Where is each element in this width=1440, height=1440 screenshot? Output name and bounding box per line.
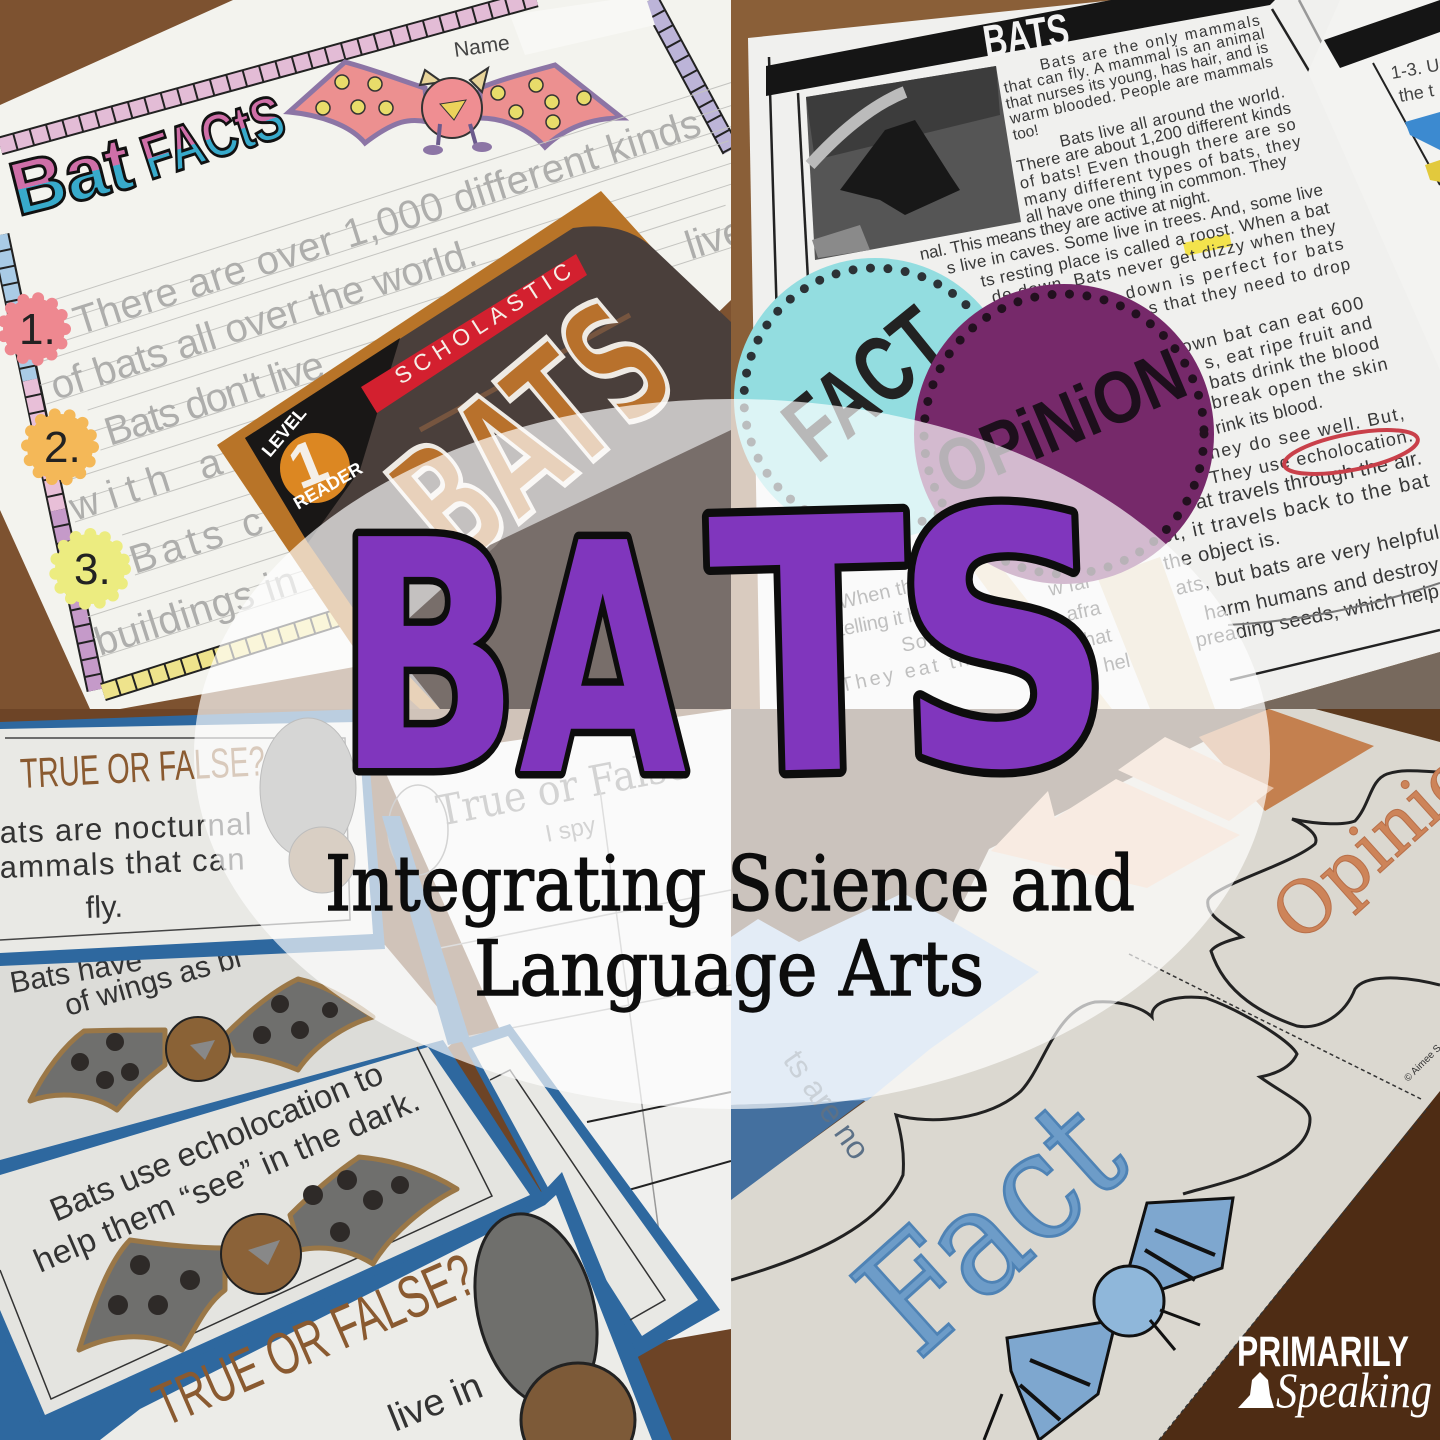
article text: preading seeds, which help	[1194, 580, 1440, 652]
handwritten fact 3: Bats don't live	[99, 343, 330, 455]
photo: bats article	[731, 0, 1440, 709]
article text: too!	[1011, 122, 1040, 144]
article text: telling it how	[837, 599, 946, 641]
article text: bats drink the blood	[1207, 333, 1381, 393]
card 2: Bats have	[7, 944, 145, 1000]
icon: coloured bat	[289, 62, 622, 155]
article paper	[748, 0, 1440, 709]
cloud: fact	[731, 997, 1310, 1389]
handwritten line 4	[68, 419, 256, 522]
title: BATS: T	[705, 442, 915, 855]
article text: hey do see well. But,	[1208, 403, 1406, 463]
highlight: echolocation	[1282, 428, 1420, 476]
number badge 1: 1.	[19, 305, 56, 354]
photo: bat facts worksheet	[0, 0, 767, 709]
article text: many different types of bats, they	[1022, 132, 1303, 210]
article text	[836, 12, 1440, 697]
article text: at travels through the air.	[1194, 447, 1424, 514]
number badge 3	[55, 534, 125, 604]
article text: s, eat ripe fruit and	[1202, 312, 1374, 373]
article text: s live in caves. Some live in trees. And, some live	[945, 180, 1325, 278]
fold lines	[1129, 954, 1432, 1440]
article text: ts resting place is called a roost. When a bat	[979, 198, 1331, 291]
number badge 3: 3.	[74, 545, 111, 594]
text on stick side: w far	[1045, 570, 1094, 601]
text on stick side: hel	[1101, 650, 1132, 677]
handwritten line 5: Bats c	[124, 499, 268, 583]
article text: rink its blood.	[1213, 392, 1325, 438]
card stack	[461, 1024, 720, 1358]
paddle: OPINION	[914, 284, 1214, 584]
article text: all have one thing in common. They	[1024, 151, 1289, 227]
logo: Primarily Speaking	[1237, 1328, 1432, 1418]
book: Scholastic Bats: LEVEL	[258, 403, 310, 461]
article text: that nurses its young, has hair, and is	[1004, 39, 1270, 113]
coloured page border	[0, 0, 731, 692]
card 1	[0, 709, 385, 966]
text on stick side: afra	[1064, 597, 1104, 626]
right page	[1308, 0, 1440, 291]
paddle: FACT	[734, 258, 982, 536]
article text: de down. Bats never get dizzy when they	[990, 216, 1338, 307]
worksheet: True or False	[433, 739, 692, 836]
subtitle: Language Arts	[474, 924, 984, 1013]
article text: ct, it travels back to the bat	[1159, 470, 1432, 548]
handwritten fact 2: of bats all over the world.	[45, 231, 482, 409]
heading: Bat Facts	[8, 96, 286, 217]
card 4: live in	[383, 1365, 488, 1440]
handwritten line 6: buildings in	[89, 559, 302, 665]
title: BATS	[336, 437, 1119, 855]
card 1: TRUE OR FALSE?	[19, 737, 266, 797]
article text: Bats are the only mammals	[1038, 12, 1261, 74]
paddle: OPINION: OPiNiON	[924, 332, 1197, 511]
book shadow seen through the oval	[385, 430, 731, 709]
article text: own bat can eat 600	[1179, 293, 1365, 357]
icon: blue bat	[984, 1198, 1233, 1440]
blue fact strips: ts are no	[776, 1043, 877, 1166]
photo: true or false cards	[0, 709, 731, 1440]
flapbook sheet	[731, 709, 1440, 1440]
card 4: TRUE OR FALSE?	[143, 1241, 485, 1439]
article text: They use echolocation.	[1208, 425, 1414, 488]
title: BATS: S	[888, 437, 1119, 851]
article text: Some p	[899, 620, 976, 657]
handwritten fact 2	[34, 141, 744, 412]
tan fact strips	[991, 709, 1374, 888]
number badge 2	[27, 414, 93, 480]
article text: warm blooded. People are mammals	[1007, 53, 1275, 128]
article text: break open the skin	[1209, 354, 1389, 413]
card 1: fly.	[85, 889, 124, 925]
title: BATS: A	[519, 477, 688, 847]
article text: s that they need to drop	[1147, 254, 1352, 318]
card 1: ats are nocturnal	[0, 806, 252, 850]
photo: fact and opinion flapbook	[731, 703, 1440, 1440]
article text: Bats live all around the world.	[1058, 83, 1286, 151]
popsicle sticks	[974, 557, 1215, 709]
pencil underline	[1228, 583, 1440, 625]
article text: They eat the	[838, 645, 985, 697]
article text: When the	[836, 573, 926, 614]
cloud: opinion	[1208, 703, 1440, 1027]
bat on card 2	[30, 979, 373, 1110]
heading: Bat Facts: FACtS	[133, 83, 293, 193]
text on stick side	[1048, 582, 1130, 672]
article text: ats, but bats are very helpful	[1173, 522, 1440, 600]
card 3: help them “see” in the dark.	[28, 1081, 425, 1279]
number badge 2: 2.	[44, 423, 81, 472]
paddle: FACT: FACT	[764, 287, 968, 481]
article text: that can fly. A mammal is an animal	[1002, 25, 1266, 97]
subtitle: Integrating Science and	[325, 839, 1135, 928]
card 3: Bats use echolocation to	[44, 1055, 388, 1228]
book: Scholastic Bats: BATS	[357, 264, 710, 605]
right page: the t	[1397, 80, 1435, 106]
text on stick side: that	[1076, 624, 1114, 653]
title: BATS: B	[336, 473, 520, 843]
card 1: ammals that can	[0, 841, 245, 885]
highlight: roost	[1183, 233, 1232, 256]
worksheet paper	[0, 0, 731, 709]
handwritten fact 1: There are over 1,000 different kinds	[68, 101, 706, 344]
card 3	[0, 1040, 545, 1427]
card 2	[0, 816, 470, 1170]
blue fact strips	[731, 893, 1039, 1200]
wood lower right	[1159, 1091, 1440, 1440]
book: Scholastic Bats	[217, 191, 731, 709]
card 2: of wings as bi	[61, 941, 245, 1023]
article text: the object is.	[1161, 527, 1282, 575]
bat on card 3	[79, 1157, 457, 1350]
article heading band	[766, 0, 1275, 96]
worksheet: I spy	[543, 812, 598, 848]
article border lines	[769, 0, 1440, 680]
worksheet	[380, 709, 731, 1345]
handwritten fact 3	[88, 202, 750, 458]
translucent white oval	[194, 399, 1270, 1109]
name label: Name	[452, 31, 511, 62]
subtitle	[325, 839, 1135, 1013]
article photo	[806, 66, 1021, 260]
article text: down is perfect for bats	[1124, 234, 1345, 303]
number badge 1	[3, 298, 65, 360]
article text: of bats! Even though there are so	[1018, 115, 1297, 193]
article text: nal. This means they are active at night.	[918, 186, 1212, 264]
book: Scholastic Bats: SCHOLASTIC	[390, 257, 576, 389]
handwritten line 4: with a	[63, 439, 228, 530]
cloud: fact: Fact	[826, 1065, 1158, 1389]
book: Scholastic Bats: READER	[290, 458, 366, 513]
handwritten fact 3: live	[680, 208, 750, 268]
book: Scholastic Bats: 1	[279, 426, 337, 503]
article text: harm humans and destroy	[1202, 554, 1440, 625]
heading: Bat Facts: Bat	[2, 121, 140, 232]
article text: There are about 1,200 different kinds	[1015, 99, 1293, 176]
